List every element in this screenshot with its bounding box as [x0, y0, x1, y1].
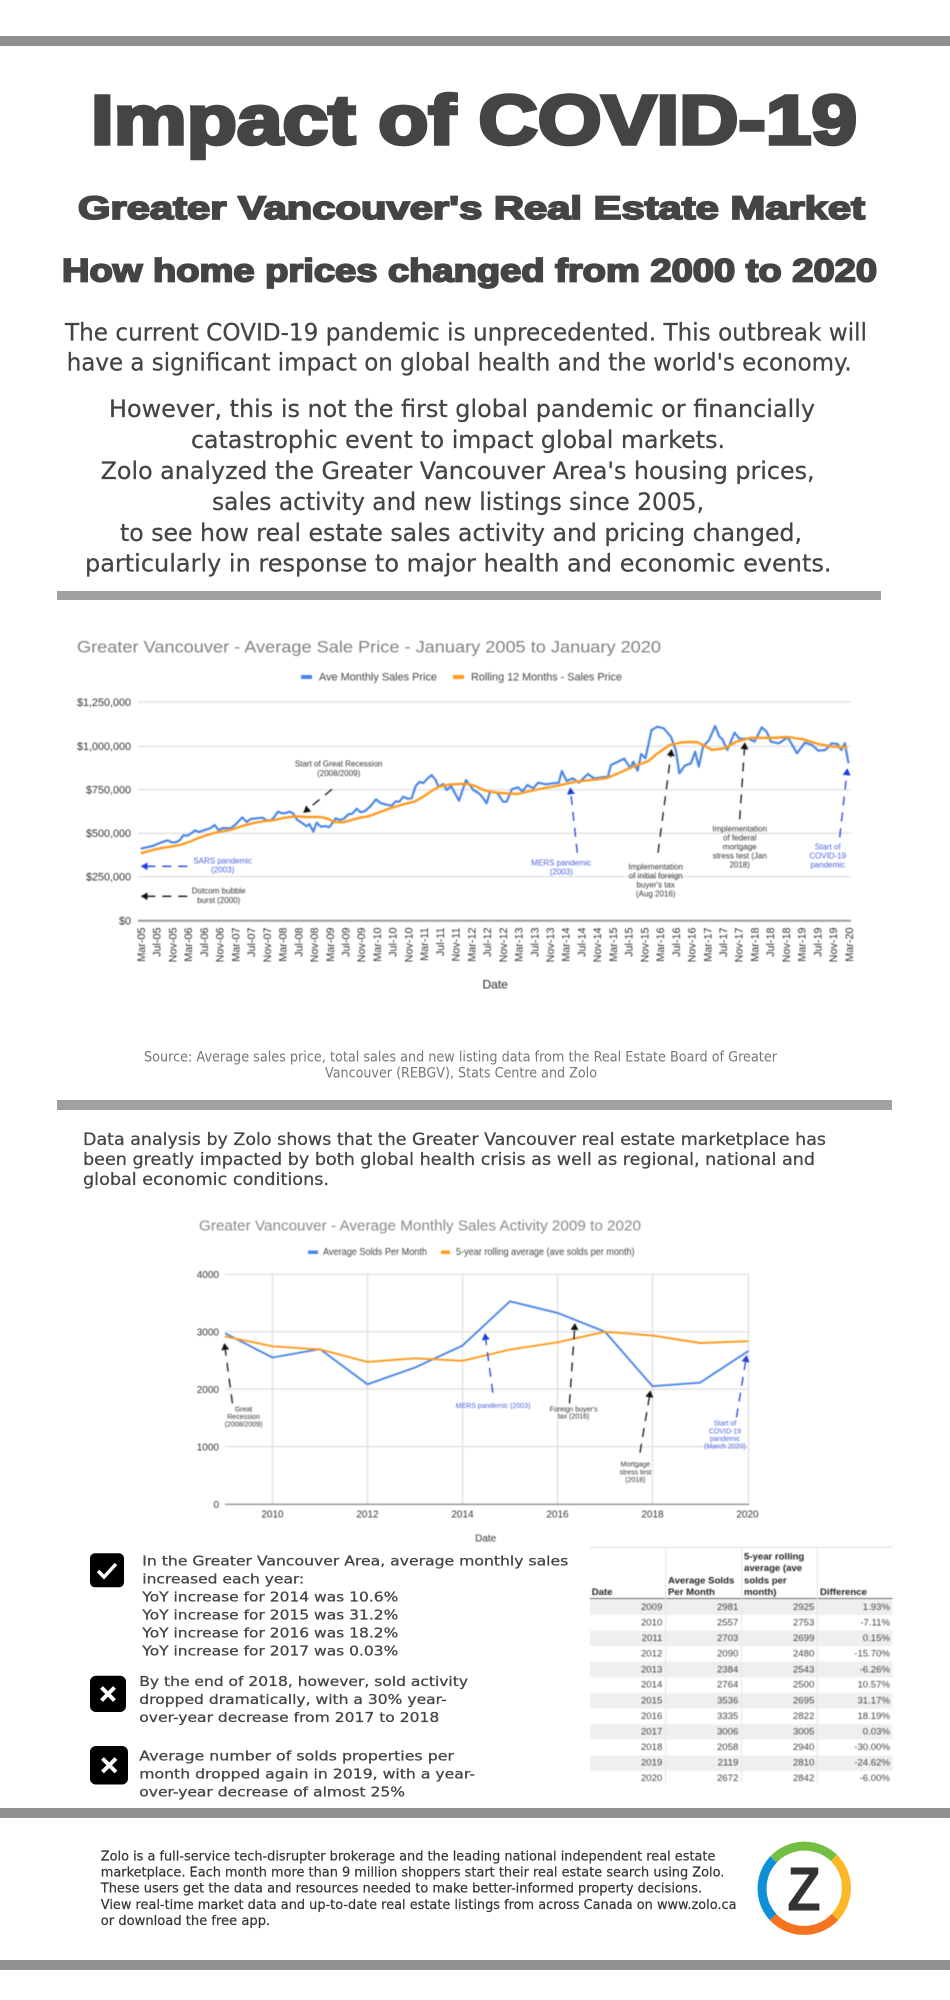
annotation: COVID-19: Start of: [714, 1421, 736, 1428]
annotation: SARS pandemic: SARS pandemic: [193, 857, 252, 866]
source note: Vancouver (REBGV), Stats Centre and Zolo: [325, 1066, 597, 1082]
x axis labels: Jul-08: [293, 928, 305, 957]
line: 5-year rolling average: [225, 1332, 748, 1362]
annotation: federal stress test: of federal: [723, 833, 757, 842]
data analysis text: been greatly impacted by both global health crisis as well as regional, national and: [83, 1150, 815, 1170]
table rows: -24.62%: [854, 1758, 890, 1769]
table header: Average Solds: [668, 1575, 734, 1586]
icon: cross: [90, 1746, 128, 1784]
table rows: 2557: [717, 1617, 738, 1628]
bullet text: YoY increase for 2016 was 18.2%: [141, 1626, 398, 1641]
bullet text: dropped dramatically, with a 30% year-: [139, 1693, 447, 1708]
bullet text: In the Greater Vancouver Area, average monthly sales: [142, 1554, 569, 1569]
bullet text: [141, 1554, 569, 1659]
table rows: 2699: [793, 1633, 814, 1644]
x axis labels: Mar-06: [183, 928, 195, 962]
x axis labels: Mar-11: [419, 928, 431, 961]
x axis labels: Nov-14: [592, 928, 604, 962]
table rows: 2009: [641, 1602, 662, 1613]
bullet: yearly increases: [90, 1553, 569, 1659]
x axis labels: Jul-05: [152, 928, 164, 957]
annotation: great recession: [295, 760, 382, 812]
annotation: COVID-19: [809, 769, 847, 869]
x axis labels: Mar-09: [325, 928, 337, 962]
table rows: 18.19%: [857, 1711, 890, 1722]
table rows: -15.70%: [854, 1649, 890, 1660]
legend: Average Solds Per Month: [323, 1246, 427, 1258]
table rows: 2480: [793, 1649, 814, 1660]
bullet text: over-year decrease from 2017 to 2018: [139, 1711, 439, 1726]
data table: [590, 1547, 893, 1784]
x axis labels: Nov-19: [828, 928, 840, 962]
bullet text: over-year decrease of almost 25%: [139, 1785, 405, 1800]
annotation: dotcom bubble: Dotcom bubble: [192, 887, 246, 896]
table rows: 2842: [793, 1773, 814, 1784]
bullet text: Average number of solds properties per: [139, 1749, 455, 1764]
x axis labels: Jul-12: [482, 928, 494, 957]
y axis labels: $500,000: [86, 828, 131, 840]
table rows: 3536: [717, 1695, 738, 1706]
table header: Difference: [820, 1587, 867, 1598]
x axis labels: Jul-11: [435, 928, 447, 956]
table header: average (ave: [744, 1563, 802, 1574]
table rows: 2981: [717, 1602, 738, 1613]
x axis labels: Nov-17: [734, 928, 746, 962]
table header: Per Month: [668, 1587, 715, 1598]
table header: month): [744, 1587, 777, 1598]
x axis labels: Jul-18: [765, 928, 777, 957]
table rows: 1.93%: [863, 1602, 890, 1613]
annotation: COVID-19: COVID-19: [809, 851, 847, 860]
annotation: SARS pandemic: [142, 857, 252, 875]
x axis labels: 2018: [641, 1509, 664, 1520]
annotation: COVID-19: [704, 1356, 746, 1450]
x axis labels: Jul-06: [199, 928, 211, 957]
intro text block: sales activity and new listings since 2005,: [212, 488, 704, 516]
x axis labels: 2020: [736, 1509, 759, 1520]
bullet: 2018 drop: [90, 1675, 468, 1726]
annotation: great recession: Great: [235, 1406, 252, 1413]
x axis labels: Jul-07: [246, 928, 258, 957]
y axis labels: 3000: [197, 1328, 219, 1338]
table header: 5-year rolling: [744, 1551, 804, 1562]
table rows: 2010: [641, 1617, 662, 1628]
table rows: 2672: [717, 1773, 738, 1784]
annotation: mortgage stress test: Mortgage: [621, 1462, 650, 1469]
intro text block: Zolo analyzed the Greater Vancouver Area's housing prices,: [101, 457, 815, 485]
intro text block: have a significant impact on global health and the world's economy.: [67, 349, 852, 377]
annotation: foreign buyer's tax: of initial foreign: [629, 872, 683, 881]
table rows: 2925: [793, 1602, 814, 1613]
title: Impact of COVID-19: [91, 81, 857, 159]
footer about text: marketplace. Each month more than 9 million shoppers start their real estate search using Zolo.: [101, 1865, 724, 1881]
panel: sales activity chart: [197, 1218, 759, 1545]
legend: [301, 672, 622, 684]
x axis labels: Jul-10: [388, 928, 400, 957]
table rows: 2013: [641, 1664, 662, 1675]
annotation: great recession: (2008/2009): [317, 769, 361, 778]
source note: Source: Average sales price, total sales and new listing data from the Real Estate Board of Greater: [144, 1050, 777, 1066]
legend: [308, 1246, 635, 1258]
annotation: great recession: Recession: [227, 1414, 260, 1421]
y axis labels: [197, 1270, 219, 1511]
x axis labels: Mar-17: [702, 928, 714, 962]
x axis labels: Nov-05: [168, 928, 180, 962]
annotation: foreign buyer's tax: (Aug 2016): [636, 890, 676, 899]
annotation: MERS pandemic: MERS pandemic: [531, 859, 591, 868]
x axis labels: Mar-07: [230, 928, 242, 962]
table rows: 2764: [717, 1680, 739, 1691]
x axis labels: 2014: [451, 1509, 474, 1520]
x axis labels: Mar-19: [797, 928, 809, 962]
table rows: [641, 1602, 890, 1784]
x axis labels: Mar-08: [278, 928, 290, 962]
icon: check mark: [90, 1553, 124, 1587]
annotation: COVID-19: Start of: [815, 842, 841, 851]
table rows: 2019: [641, 1758, 662, 1769]
annotation: foreign buyer's tax: [628, 750, 683, 899]
bullet text: month dropped again in 2019, with a year-: [139, 1767, 475, 1782]
table header: [592, 1551, 867, 1598]
intro text block: to see how real estate sales activity and pricing changed,: [120, 519, 802, 547]
table rows: 10.57%: [857, 1680, 890, 1691]
y axis labels: $750,000: [86, 784, 131, 796]
x axis labels: Mar-20: [844, 928, 856, 962]
table rows: -7.11%: [860, 1617, 890, 1628]
table rows: 2940: [793, 1742, 814, 1753]
table rows: 2020: [641, 1773, 662, 1784]
table rows: 2384: [717, 1664, 739, 1675]
table rows: 31.17%: [857, 1695, 890, 1706]
footer about text: View real-time market data and up-to-date real estate listings from across Canada on www.zolo.ca: [101, 1897, 737, 1913]
y axis labels: 0: [213, 1500, 219, 1511]
line: average monthly sales price: [141, 726, 848, 849]
data analysis text: [83, 1130, 826, 1190]
x axis labels: Nov-16: [687, 928, 699, 962]
y axis labels: 1000: [197, 1442, 219, 1454]
x axis labels: Mar-18: [750, 928, 762, 962]
table rows: 2011: [642, 1633, 662, 1644]
x axis labels: Mar-12: [466, 928, 478, 962]
footer about text: [100, 1849, 737, 1929]
table rows: 2822: [793, 1711, 814, 1722]
x axis labels: Nov-06: [215, 928, 227, 962]
legend: 5-year rolling average (ave solds per month): [456, 1246, 635, 1258]
annotation: great recession: Start of Great Recession: [295, 760, 382, 769]
annotation: COVID-19: pandemic: [710, 1436, 741, 1443]
bullet text: YoY increase for 2017 was 0.03%: [141, 1644, 398, 1659]
bullet text: increased each year:: [142, 1572, 304, 1587]
x axis title: Date: [482, 978, 508, 992]
table rows: 2119: [718, 1758, 738, 1769]
annotation: foreign buyer's tax: tax (2016): [558, 1414, 589, 1421]
footer about text: Zolo is a full-service tech-disrupter brokerage and the leading national independent real estate: [101, 1849, 715, 1865]
x axis labels: 2016: [546, 1509, 569, 1520]
annotation: federal stress test: [712, 743, 767, 869]
line: average solds per month: [225, 1301, 748, 1386]
x axis labels: Nov-18: [781, 928, 793, 962]
table rows: 2012: [641, 1649, 662, 1660]
intro text block: catastrophic event to impact global markets.: [191, 426, 725, 454]
bullet text: YoY increase for 2014 was 10.6%: [141, 1590, 398, 1605]
annotation: federal stress test: Implementation: [712, 824, 767, 833]
table rows: 2810: [793, 1758, 814, 1769]
y axis labels: 2000: [197, 1385, 219, 1396]
x axis labels: Mar-05: [136, 928, 148, 962]
table rows: -6.00%: [860, 1773, 890, 1784]
x axis labels: Nov-11: [451, 928, 463, 962]
annotation: mortgage stress test: [619, 1391, 651, 1484]
x axis labels: Mar-16: [655, 928, 667, 962]
bullet text: By the end of 2018, however, sold activity: [139, 1675, 468, 1690]
intro text block: The current COVID-19 pandemic is unprecedented. This outbreak will: [64, 319, 867, 347]
table rows: 3005: [793, 1727, 814, 1738]
annotation: great recession: [224, 1344, 262, 1429]
y axis labels: $0: [119, 916, 131, 928]
x axis labels: [136, 928, 856, 962]
x axis labels: Jul-19: [812, 928, 824, 957]
x axis labels: Nov-07: [262, 928, 274, 962]
x axis labels: Jul-09: [340, 928, 352, 957]
intro text block: particularly in response to major health and economic events.: [85, 550, 832, 578]
icon: Zolo logo: Z: [787, 1856, 821, 1925]
annotation: MERS pandemic: (2003): [550, 868, 573, 877]
panel: average sale price chart: [77, 638, 856, 992]
annotation: COVID-19: (March 2020): [704, 1443, 746, 1450]
table rows: 3006: [717, 1727, 738, 1738]
footer about text: These users get the data and resources needed to make better-informed property decisions.: [100, 1881, 702, 1897]
x axis labels: Mar-13: [514, 928, 526, 962]
chart title: Greater Vancouver - Average Sale Price - January 2005 to January 2020: [77, 638, 661, 657]
icon: cross: [90, 1676, 126, 1712]
table rows: -30.00%: [854, 1742, 890, 1753]
table rows: 2016: [641, 1711, 662, 1722]
legend: Ave Monthly Sales Price: [319, 672, 437, 684]
subtitle: period: How home prices changed from 2000 to 2020: [62, 252, 877, 288]
y axis labels: [77, 697, 131, 928]
annotation: MERS pandemic: MERS pandemic (2003): [456, 1403, 530, 1410]
table rows: 3335: [717, 1711, 738, 1722]
icon: Zolo logo: [762, 1846, 846, 1930]
table rows: 2014: [641, 1680, 663, 1691]
x axis labels: Mar-14: [561, 928, 573, 962]
table rows: 2703: [717, 1633, 738, 1644]
legend: Rolling 12 Months - Sales Price: [471, 672, 622, 684]
annotation: MERS pandemic: [531, 788, 591, 877]
annotation: foreign buyer's tax: [550, 1324, 598, 1421]
x axis labels: Nov-08: [309, 928, 321, 962]
source note: [144, 1050, 777, 1082]
table rows: 2017: [641, 1727, 662, 1738]
x axis labels: [261, 1509, 759, 1520]
x axis labels: Mar-15: [608, 928, 620, 962]
annotation: mortgage stress test: stress test: [619, 1469, 651, 1476]
annotation: COVID-19: pandemic: [810, 860, 845, 869]
annotation: federal stress test: 2018): [729, 860, 750, 869]
x axis labels: Jul-16: [671, 928, 683, 957]
intro text block: However, this is not the first global pandemic or financially: [109, 395, 815, 423]
x axis labels: Nov-09: [356, 928, 368, 962]
annotation: mortgage stress test: (2018): [625, 1477, 646, 1484]
annotation: foreign buyer's tax: Implementation: [628, 863, 683, 872]
table header: solds per: [744, 1575, 787, 1586]
table rows: 2018: [641, 1742, 662, 1753]
y axis labels: $1,000,000: [77, 741, 131, 753]
chart title: Greater Vancouver - Average Monthly Sales Activity 2009 to 2020: [199, 1218, 641, 1235]
line: rolling 12 months sales price: [141, 737, 847, 853]
y axis labels: 4000: [197, 1270, 219, 1281]
table header: Date: [592, 1587, 612, 1598]
bullet text: YoY increase for 2015 was 31.2%: [141, 1608, 398, 1623]
bullet text: [139, 1675, 468, 1726]
y axis labels: $1,250,000: [77, 697, 131, 709]
data analysis text: Data analysis by Zolo shows that the Greater Vancouver real estate marketplace has: [83, 1130, 826, 1150]
x axis labels: Nov-15: [639, 928, 651, 962]
annotation: federal stress test: stress test (Jan: [713, 852, 767, 861]
annotation: foreign buyer's tax: buyer's tax: [636, 881, 675, 890]
intro text block: [64, 319, 867, 578]
table rows: 0.15%: [863, 1633, 890, 1644]
annotation: great recession: (2008/2009): [225, 1422, 262, 1429]
x axis labels: Nov-12: [498, 928, 510, 962]
data analysis text: global economic conditions.: [83, 1170, 329, 1190]
table rows: 2500: [793, 1680, 814, 1691]
table rows: 2753: [793, 1617, 814, 1628]
table rows: 2015: [641, 1695, 662, 1706]
annotation: federal stress test: mortgage: [723, 843, 757, 852]
table rows: 2090: [717, 1649, 738, 1660]
x axis labels: 2012: [356, 1509, 379, 1520]
annotation: dotcom bubble: burst (2000): [197, 896, 241, 905]
subtitle: market: Greater Vancouver's Real Estate Market: [78, 190, 865, 226]
table rows: 2543: [793, 1664, 814, 1675]
y axis labels: $250,000: [86, 872, 131, 884]
bullet: 2019 drop: [90, 1746, 475, 1800]
footer about text: or download the free app.: [101, 1913, 270, 1929]
x axis labels: Jul-14: [576, 928, 588, 957]
table rows: 0.03%: [863, 1727, 890, 1738]
bullet text: [139, 1749, 475, 1800]
annotation: COVID-19: COVID-19: [709, 1428, 741, 1435]
x axis labels: Nov-10: [403, 928, 415, 962]
annotation: dotcom bubble: [142, 887, 246, 905]
table rows: 2058: [717, 1742, 738, 1753]
x axis labels: 2010: [261, 1509, 284, 1520]
annotation: MERS pandemic: [456, 1334, 530, 1410]
x axis labels: Nov-13: [545, 928, 557, 962]
x axis labels: Jul-13: [529, 928, 541, 957]
x axis title: Date: [475, 1534, 497, 1545]
x axis labels: Jul-17: [718, 928, 730, 957]
table rows: 2695: [793, 1695, 814, 1706]
annotation: foreign buyer's tax: Foreign buyer's: [550, 1406, 598, 1413]
x axis labels: Jul-15: [624, 928, 636, 957]
annotation: SARS pandemic: (2003): [211, 866, 235, 875]
x axis labels: Mar-10: [372, 928, 384, 962]
table rows: -6.26%: [860, 1664, 890, 1675]
